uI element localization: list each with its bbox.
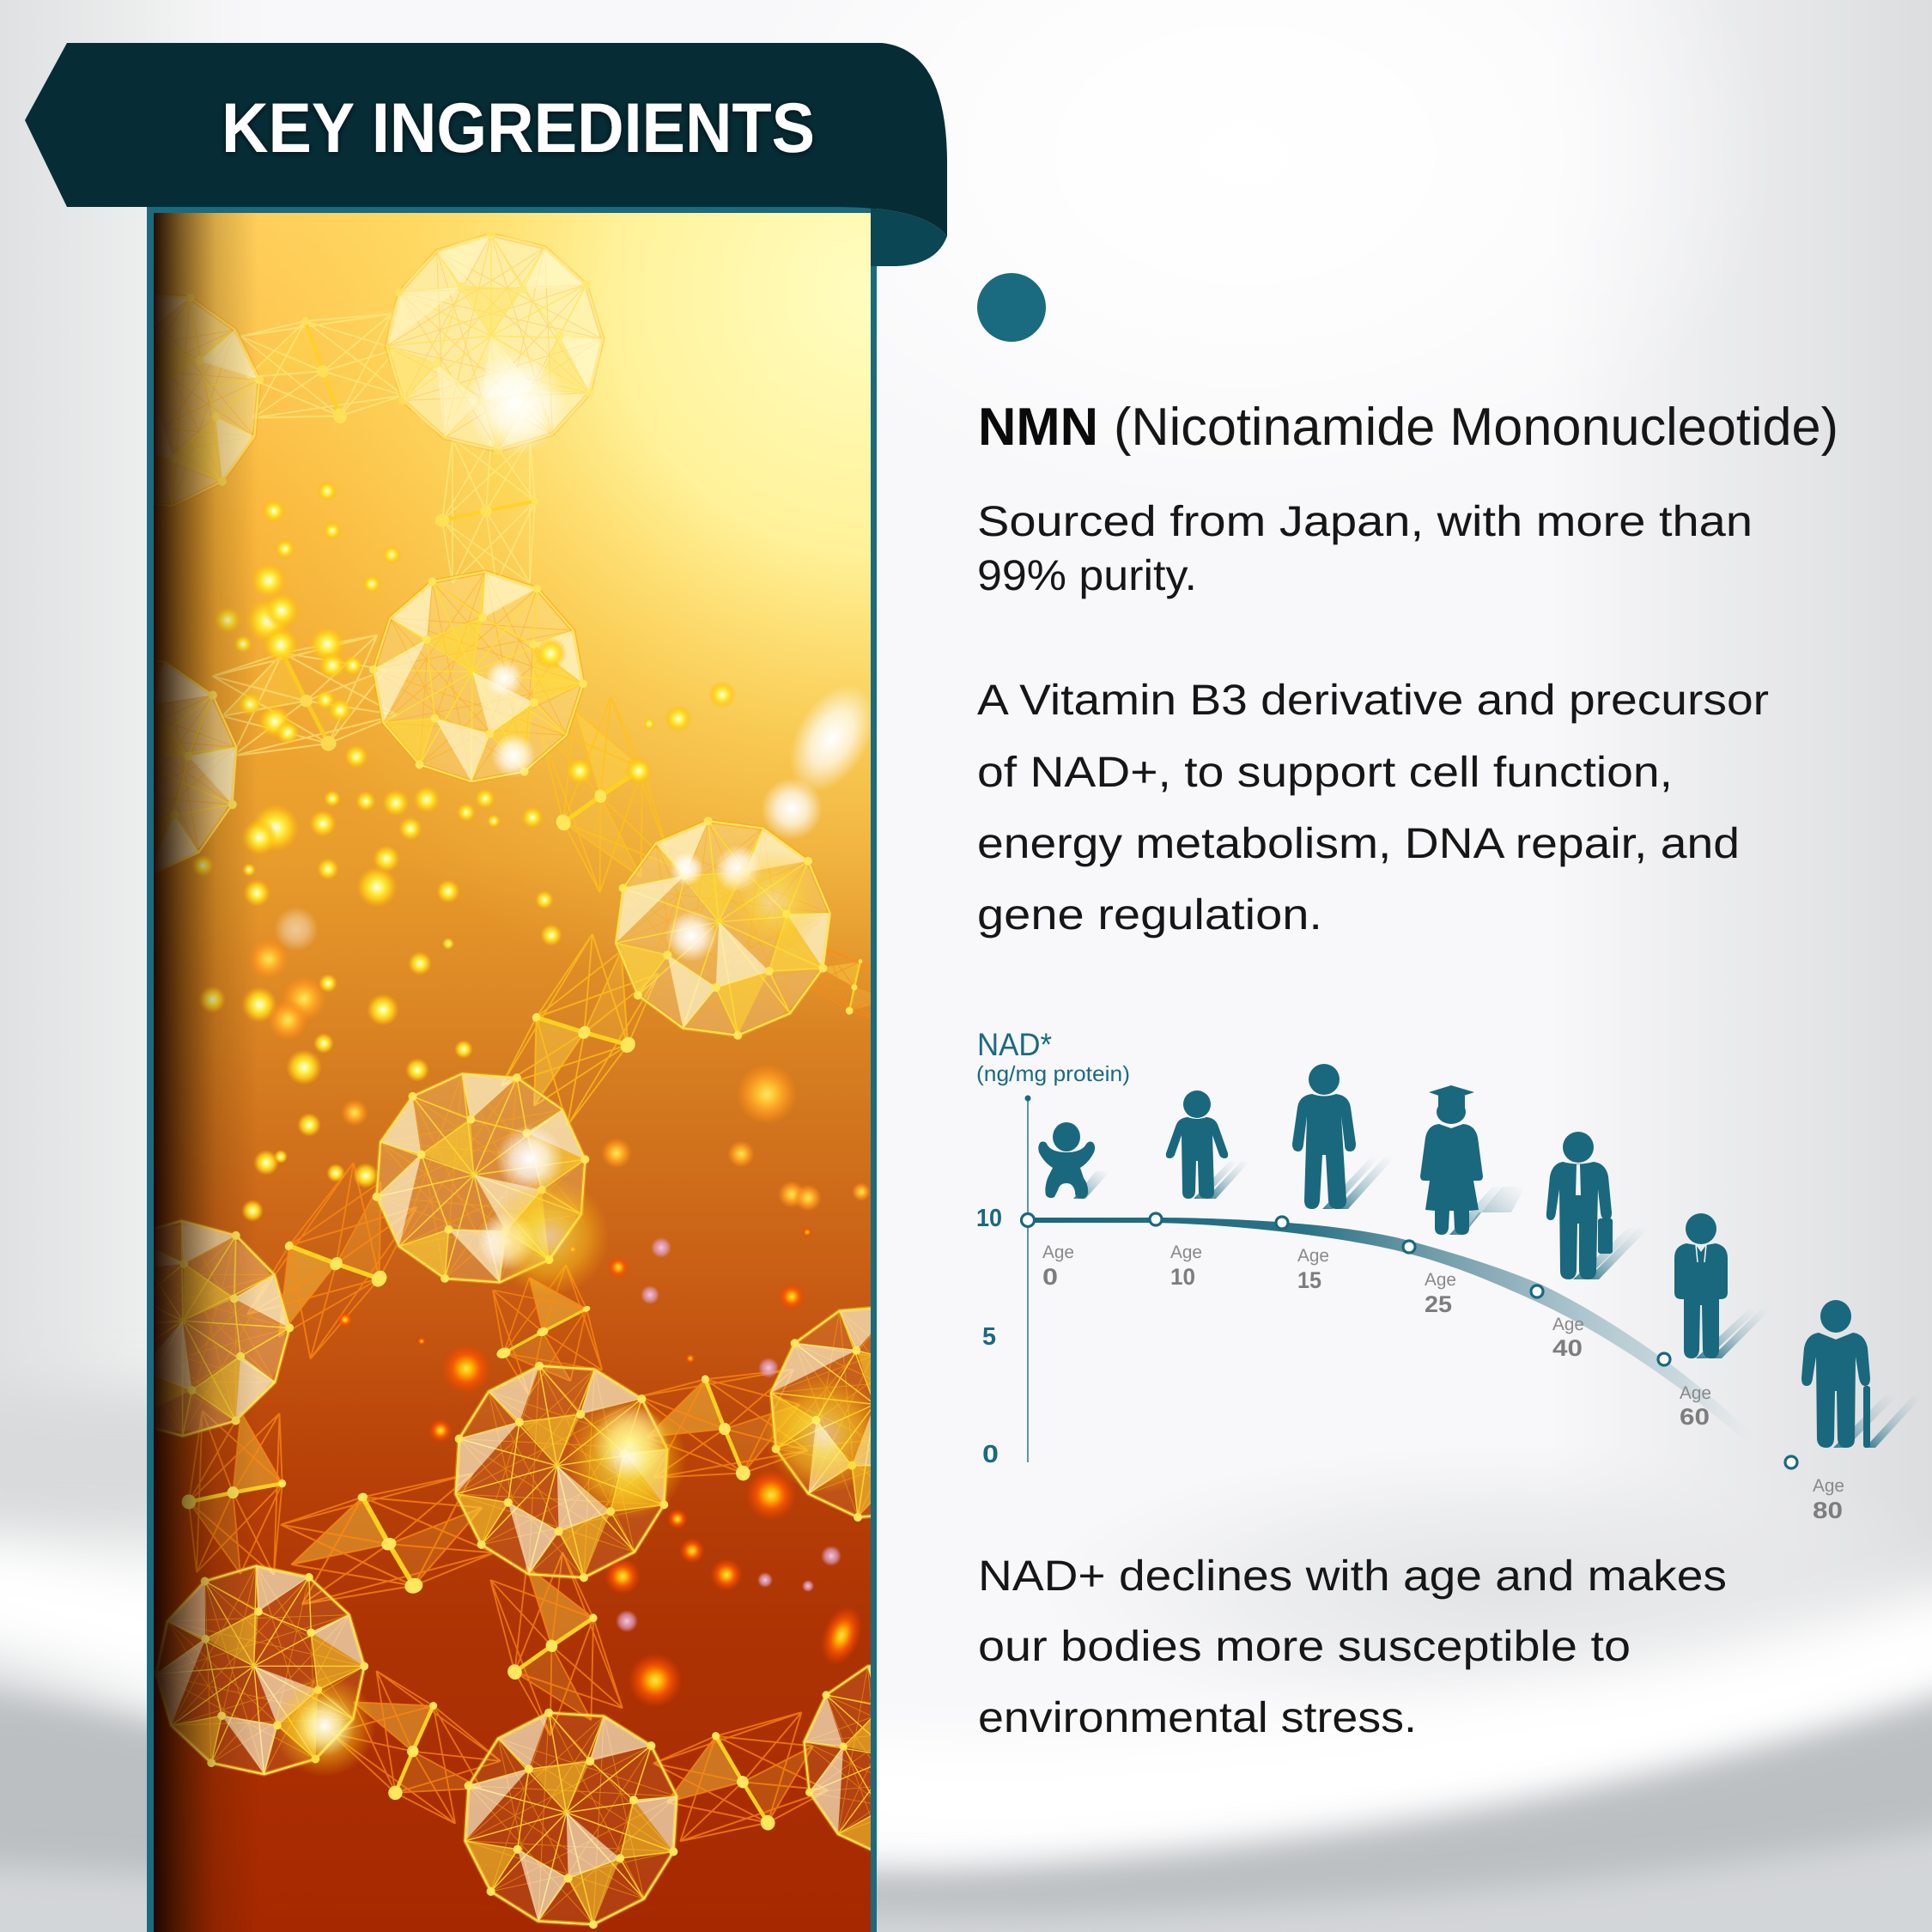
text block: vitamin B3 description: energy metabolism, DNA repair, and bbox=[977, 819, 1740, 867]
icon: child bbox=[1166, 1091, 1228, 1199]
axis title: (ng/mg protein) bbox=[976, 1062, 1130, 1086]
y axis: 0 bbox=[982, 1441, 999, 1468]
age labels: Age bbox=[1170, 1242, 1202, 1262]
text block: sourcing bbox=[977, 497, 1753, 599]
text block: vitamin B3 description: A Vitamin B3 derivative and precursor bbox=[977, 676, 1769, 724]
age labels: Age bbox=[1297, 1246, 1329, 1266]
age labels: Age bbox=[1042, 1242, 1074, 1262]
axis title bbox=[976, 1027, 1130, 1086]
age labels: 80 bbox=[1813, 1498, 1843, 1523]
age labels: 40 bbox=[1552, 1335, 1583, 1361]
icon: baby bbox=[1038, 1122, 1095, 1199]
decline curve bbox=[1028, 1218, 1753, 1443]
curve markers bbox=[1022, 1213, 1797, 1468]
age labels: Age bbox=[1813, 1476, 1844, 1496]
age labels: 10 bbox=[1170, 1264, 1195, 1290]
age labels: Age bbox=[1680, 1383, 1711, 1403]
title: KEY INGREDIENTS bbox=[222, 89, 815, 167]
text block: sourcing: 99% purity. bbox=[977, 551, 1197, 599]
text block: NAD+ decline: environmental stress. bbox=[978, 1693, 1417, 1741]
text block: vitamin B3 description bbox=[977, 676, 1769, 939]
banner: key ingredients bbox=[25, 43, 947, 236]
text block: sourcing: Sourced from Japan, with more than bbox=[977, 497, 1753, 545]
text block: vitamin B3 description: gene regulation. bbox=[977, 890, 1322, 939]
heading: NMN: NMN bbox=[978, 398, 1098, 457]
y axis: 10 bbox=[976, 1205, 1002, 1232]
age labels: 60 bbox=[1680, 1404, 1710, 1430]
icon: teal dot bbox=[977, 273, 1046, 342]
banner fold bbox=[838, 207, 947, 266]
text block: NAD+ decline bbox=[978, 1552, 1727, 1741]
panel: golden molecule image bbox=[147, 207, 877, 1932]
icon: man in suit bbox=[1674, 1213, 1728, 1358]
molecule links bbox=[179, 304, 903, 1859]
icon: adult with briefcase bbox=[1546, 1132, 1613, 1279]
text block: vitamin B3 description: of NAD+, to support cell function, bbox=[977, 748, 1673, 796]
age labels: Age bbox=[1425, 1270, 1456, 1290]
icon: teenager bbox=[1292, 1064, 1356, 1209]
icon: graduate bbox=[1420, 1085, 1483, 1235]
age labels: 15 bbox=[1297, 1267, 1321, 1293]
text block: NAD+ decline: our bodies more susceptible to bbox=[978, 1622, 1631, 1670]
age labels: 0 bbox=[1042, 1264, 1058, 1290]
age labels bbox=[1042, 1242, 1844, 1523]
chart: NAD decline with age bbox=[976, 1027, 1923, 1523]
y axis: 5 bbox=[982, 1323, 996, 1351]
age labels: 25 bbox=[1425, 1291, 1452, 1317]
text block: NAD+ decline: NAD+ declines with age and makes bbox=[978, 1552, 1727, 1600]
figure shadows bbox=[1073, 1157, 1923, 1448]
icon: elderly man with cane bbox=[1801, 1300, 1870, 1448]
age labels: Age bbox=[1552, 1315, 1584, 1334]
glowing particles bbox=[191, 352, 892, 1777]
y axis bbox=[976, 1096, 1030, 1468]
heading: NMN: (Nicotinamide Mononucleotide) bbox=[1114, 398, 1838, 457]
axis title: NAD* bbox=[977, 1027, 1052, 1062]
molecule spheres bbox=[155, 230, 871, 1929]
